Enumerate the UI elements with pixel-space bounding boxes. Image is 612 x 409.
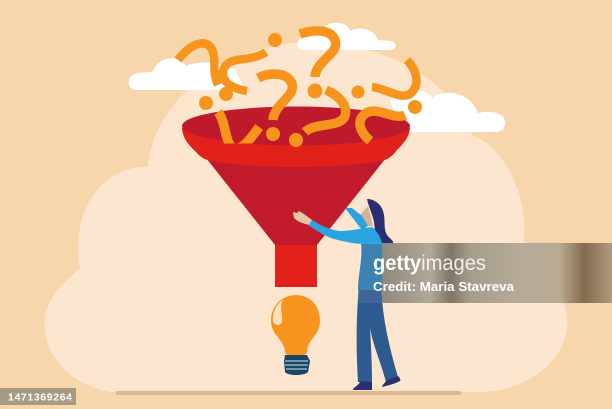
image id tag [0,388,76,405]
funnel cone [206,158,386,245]
id background [0,388,76,405]
funnel [182,106,410,287]
question mark 5 [305,90,346,132]
pale background cloud [44,42,567,392]
question mark 6 [372,60,416,96]
watermark over figure [358,243,382,303]
watermark strip [382,243,612,303]
white clouds [129,23,505,132]
legs [357,285,398,382]
id number: 1471369264 [8,392,72,404]
lower arm and shoulder [308,220,382,244]
cloud: right [390,90,505,132]
question mark dots [199,33,422,147]
question mark 4 [300,31,336,77]
question mark 3 [258,74,292,120]
torso [358,243,384,290]
question mark 1 [178,43,218,85]
ground line [116,391,461,395]
cloud: left [129,58,245,90]
raised arm [345,208,368,230]
watermark band [358,243,612,303]
question mark 7 [360,111,405,141]
funnel opening [182,106,410,146]
question mark 2 [223,52,266,91]
funnel rim band [182,128,410,167]
hand [293,211,312,225]
cloud: top [297,23,396,50]
bulb base [284,355,310,375]
question marks [178,31,416,149]
bulb highlight [273,300,283,325]
credit line: Credit: Maria Stavreva [373,279,515,294]
icon: light bulb [271,295,320,375]
bulb glass [271,295,320,356]
bulb base stripes [285,361,308,369]
shoe right [382,376,400,387]
woman figure [293,199,400,390]
face [360,206,373,226]
funnel spout [275,245,317,287]
getty images wordmark: gettyimages [373,252,486,275]
shoe left [353,381,372,390]
hair [367,199,393,246]
question mark 8 [218,112,259,149]
watermark text [373,252,515,294]
